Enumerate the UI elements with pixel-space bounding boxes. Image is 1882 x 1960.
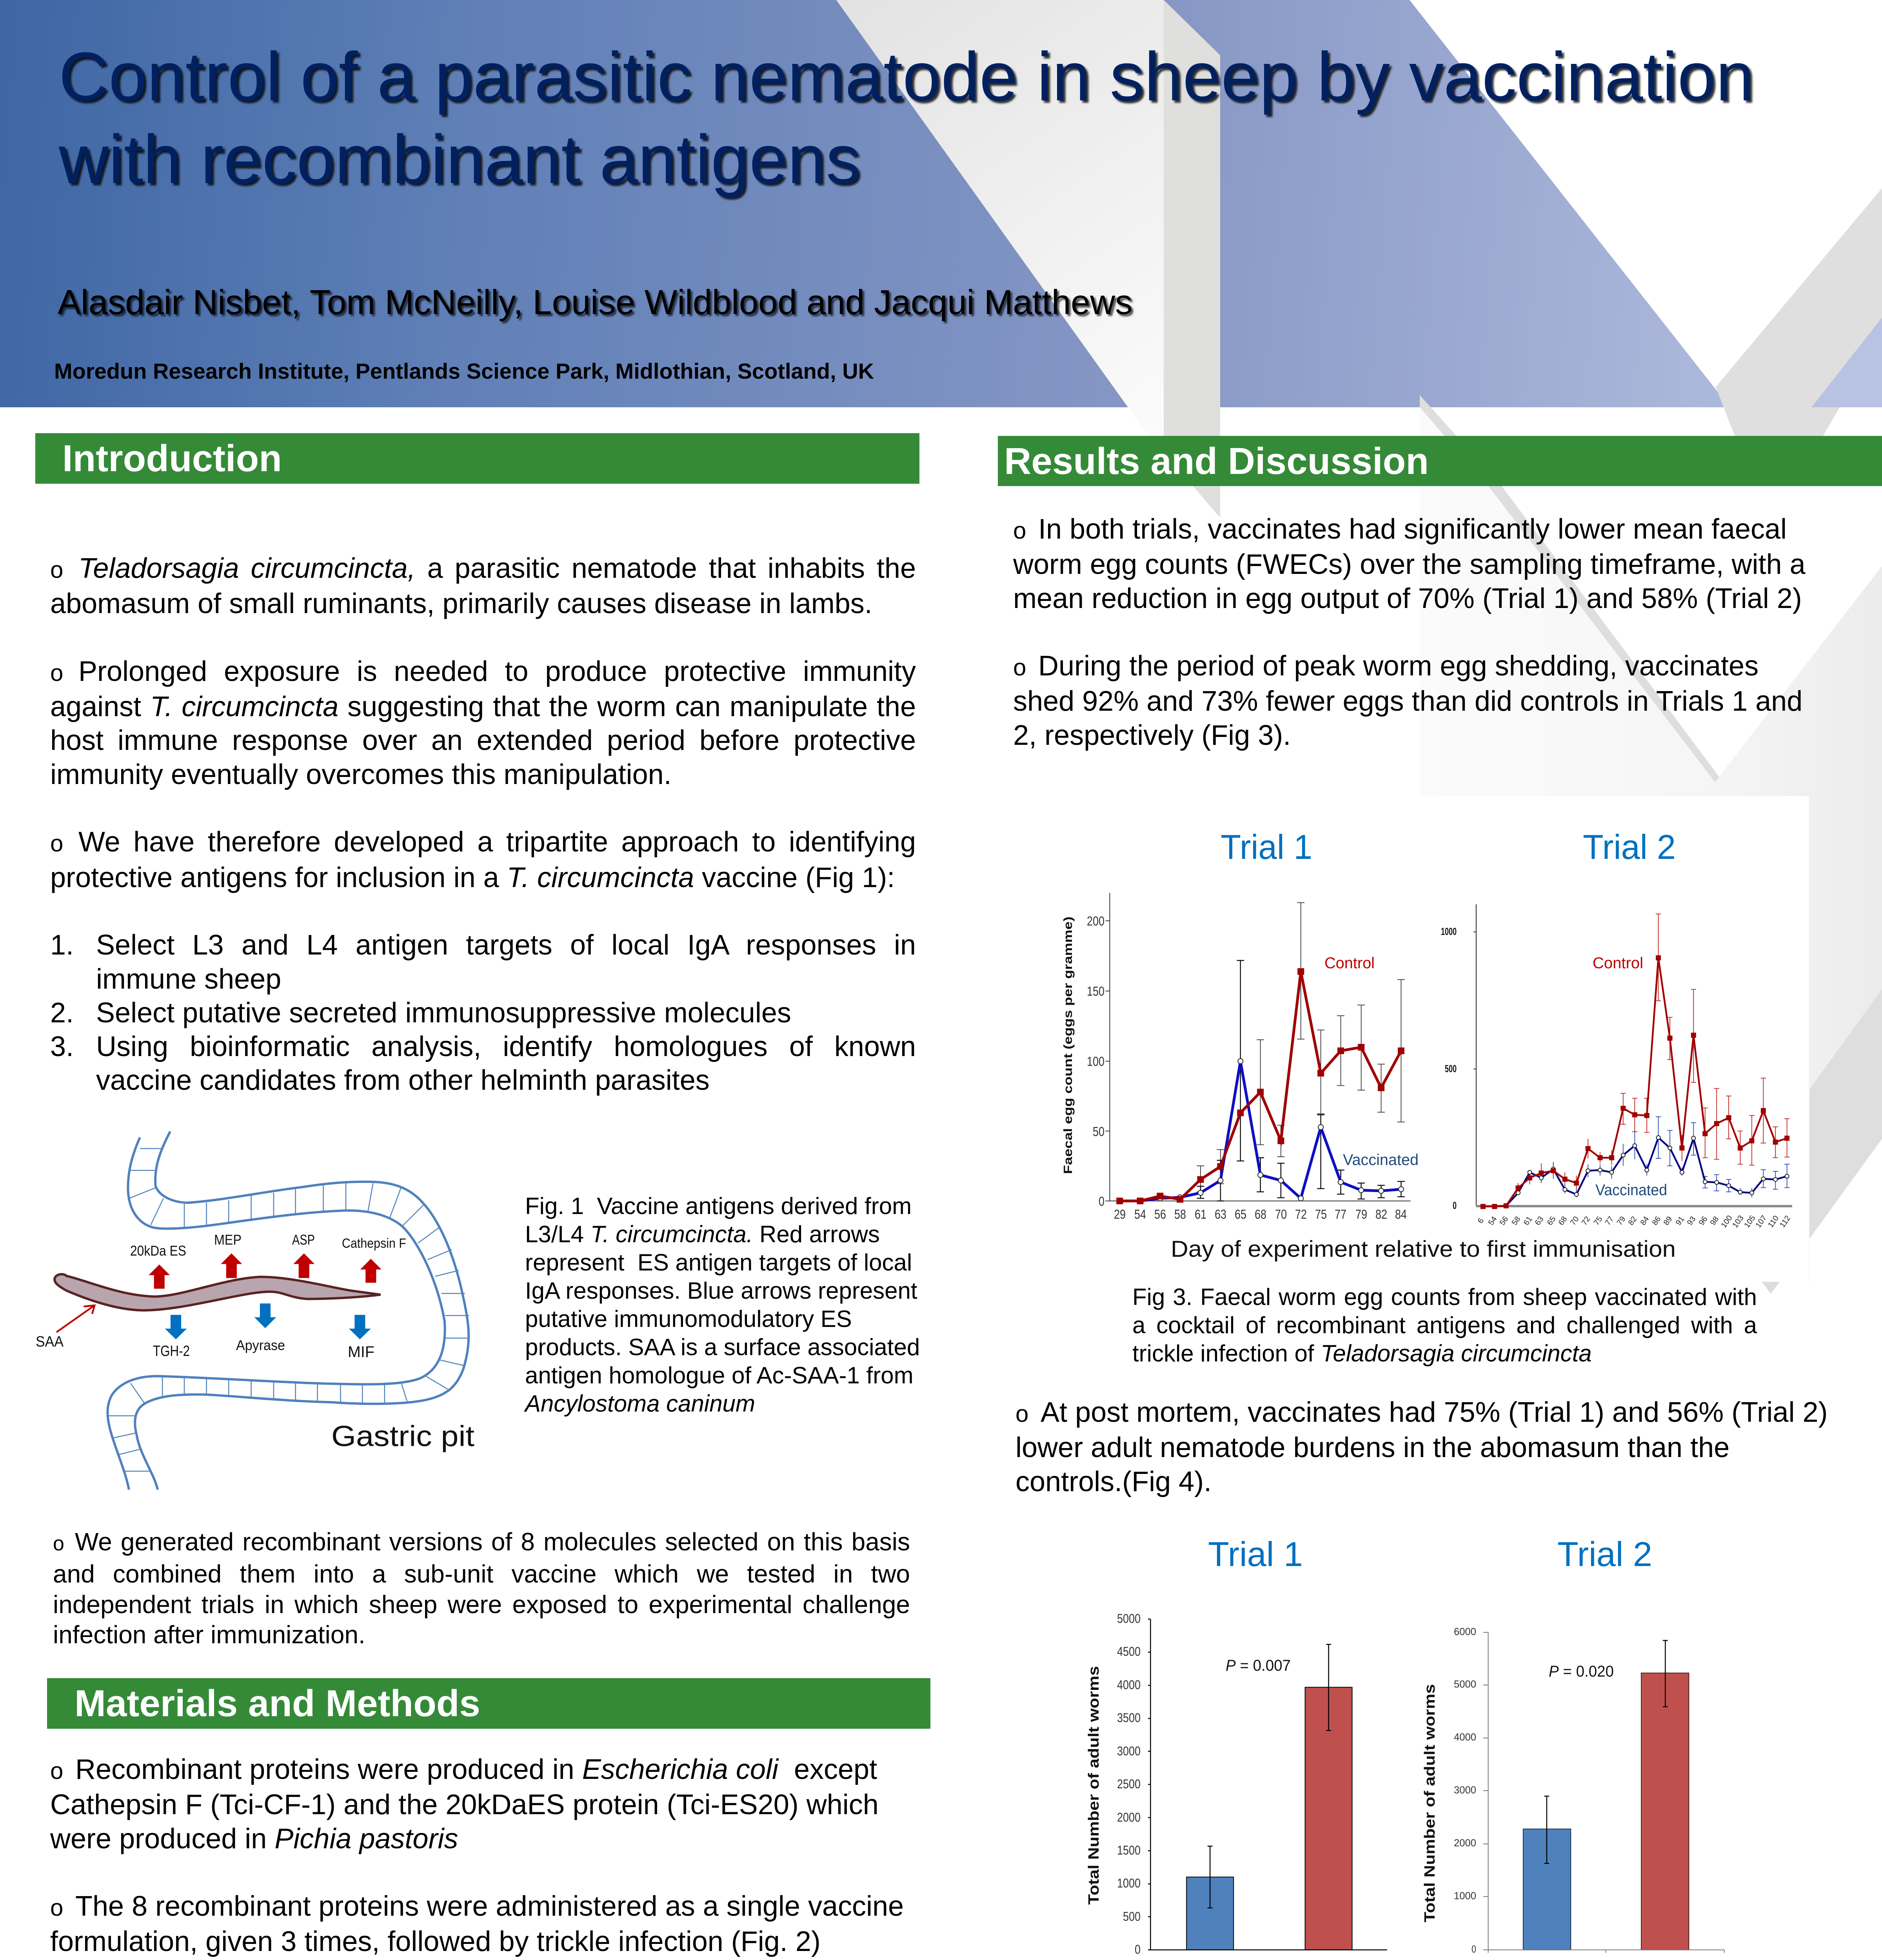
bar chart: trial 1: P = 0.007 <box>1226 1657 1291 1674</box>
line chart: trial 2: 112 <box>1778 1214 1792 1229</box>
text: recombinant vaccine: infection after immunization. <box>53 1621 365 1649</box>
text: introduction: abomasum of small ruminants, primarily causes disease in lambs. <box>50 588 872 619</box>
text: recombinant vaccine <box>53 1527 910 1650</box>
line chart: trial 1: 63 <box>1215 1207 1226 1221</box>
text: results: worm egg counts (FWECs) over the sampling timeframe, with a <box>1013 549 1806 580</box>
line chart: trial 2: 100 <box>1720 1214 1734 1230</box>
line chart: trial 1: 29 <box>1114 1207 1126 1221</box>
text: introduction <box>50 552 916 1098</box>
text: introduction: 2. <box>50 997 74 1029</box>
line chart: trial 2: 77 <box>1604 1215 1615 1227</box>
title: Control of a parasitic nematode in sheep by vaccination <box>59 38 1754 115</box>
figure 1 labels: Cathepsin F <box>342 1236 406 1251</box>
text: post mortem: lower adult nematode burdens in the abomasum than the <box>1015 1432 1729 1463</box>
caption: figure 1: products. SAA is a surface associated <box>525 1334 920 1360</box>
text: results: mean reduction in egg output of 70% (Trial 1) and 58% (Trial 2) <box>1013 583 1802 614</box>
chart title: trial 2: Trial 2 <box>1583 828 1676 866</box>
line chart: trial 2: 70 <box>1569 1215 1580 1227</box>
line chart: trial 2: 91 <box>1674 1215 1686 1227</box>
line chart: trial 2: 56 <box>1498 1215 1510 1227</box>
line chart: trial 1: 79 <box>1355 1207 1367 1221</box>
figure 3: faecal egg count charts <box>1061 828 1792 1262</box>
figure 1 labels <box>36 1232 474 1452</box>
text: introduction: Teladorsagia circumcincta, a parasitic nematode that inhabits the <box>78 553 916 584</box>
chart title: trial 2: Trial 2 <box>1557 1535 1652 1573</box>
text: materials and methods: formulation, given 3 times, followed by trickle infection (Fig. 2) <box>50 1926 821 1957</box>
line chart: trial 1: 68 <box>1255 1207 1266 1221</box>
text: introduction: Select putative secreted immunosuppressive molecules <box>96 997 791 1029</box>
blue immunomodulatory arrows <box>165 1303 371 1339</box>
caption: figure 3: Fig 3. Faecal worm egg counts from sheep vaccinated with <box>1132 1284 1757 1310</box>
line chart: trial 2: 98 <box>1709 1215 1720 1227</box>
text: introduction: Using bioinformatic analysis, identify homologues of known <box>96 1031 916 1062</box>
heading: materials and methods <box>47 1678 930 1729</box>
bar chart: trial 2: Total Number of adult worms <box>1422 1684 1438 1922</box>
line chart: trial 2: 63 <box>1533 1215 1545 1227</box>
caption: figure 1: antigen homologue of Ac-SAA-1 from <box>525 1362 914 1388</box>
line chart: trial 1: 100 <box>1087 1054 1104 1069</box>
line chart: trial 2: 75 <box>1592 1215 1604 1227</box>
title: with recombinant antigens <box>59 121 861 198</box>
text: introduction: Prolonged exposure is needed to produce protective immunity <box>78 656 916 687</box>
caption: figure 1: L3/L4 T. circumcincta. Red arrows <box>525 1221 880 1247</box>
figure 1: gastric pit diagram <box>36 1131 474 1490</box>
caption: figure 1: represent ES antigen targets of local <box>525 1249 912 1276</box>
figure 1 labels: Gastric pit <box>331 1420 474 1452</box>
text: introduction: 3. <box>50 1031 74 1062</box>
line chart: trial 1: 75 <box>1315 1207 1327 1221</box>
caption: figure 3 <box>1132 1283 1757 1368</box>
line chart: trial 1: 54 <box>1134 1207 1146 1221</box>
line chart: trial 2: 54 <box>1487 1215 1499 1227</box>
line chart: trial 2: 79 <box>1615 1215 1627 1227</box>
text: post mortem <box>1015 1396 1828 1499</box>
text: materials and methods: The 8 recombinant proteins were administered as a single vaccine <box>75 1891 904 1922</box>
chart title: trial 1: Trial 1 <box>1208 1535 1303 1573</box>
text: materials and methods: were produced in Pichia pastoris <box>50 1823 458 1855</box>
line chart: trial 2: Control <box>1593 955 1643 972</box>
line chart: trial 2: 96 <box>1697 1215 1709 1227</box>
bar chart: trial 2 <box>1422 1626 1724 1960</box>
bar chart: trial 1: 5000 <box>1117 1612 1141 1626</box>
line chart: trial 1: Vaccinated <box>1343 1151 1419 1169</box>
line chart: trial 1: 82 <box>1375 1207 1387 1221</box>
affiliation: Moredun Research Institute, Pentlands Science Park, Midlothian, Scotland, UK <box>54 359 874 383</box>
x axis label: Day of experiment relative to first immunisation <box>1171 1236 1676 1262</box>
red antigen arrows <box>149 1253 381 1289</box>
text: recombinant vaccine: We generated recombinant versions of 8 molecules selected on this basis <box>75 1528 910 1556</box>
text: materials and methods: Cathepsin F (Tci-CF-1) and the 20kDaES protein (Tci-ES20) which <box>50 1789 879 1820</box>
figure 1 labels: MIF <box>348 1343 374 1361</box>
line chart: trial 1: 61 <box>1195 1207 1206 1221</box>
line chart: trial 2: 58 <box>1510 1215 1522 1227</box>
text: recombinant vaccine: independent trials in which sheep were exposed to experimental challenge <box>53 1590 910 1619</box>
bar chart: trial 1: Total Number of adult worms <box>1086 1666 1102 1905</box>
line chart: trial 1: 72 <box>1295 1207 1307 1221</box>
figure 1 labels: ASP <box>292 1232 315 1248</box>
text: materials and methods: o <box>50 1895 63 1921</box>
bar chart: trial 1 <box>1086 1612 1387 1960</box>
text: results: o <box>1013 517 1026 544</box>
figure 1 labels: MEP <box>214 1232 242 1248</box>
bar chart: trial 2: 2000 <box>1454 1837 1476 1849</box>
bar chart: trial 1: 1500 <box>1117 1843 1141 1857</box>
heading: results and discussion: Results and Discussion <box>1004 440 1429 482</box>
bar chart: trial 1: 4500 <box>1117 1644 1141 1659</box>
bar chart: trial 2: 4000 <box>1454 1731 1476 1743</box>
line chart: trial 2: 103 <box>1731 1214 1746 1230</box>
figure 1 labels: 20kDa ES <box>130 1243 186 1259</box>
heading: introduction: Introduction <box>62 437 282 479</box>
chart title: trial 1: Trial 1 <box>1221 828 1312 866</box>
text: recombinant vaccine: and combined them into a sub-unit vaccine which we tested in two <box>53 1560 910 1588</box>
line chart: trial 1 <box>1087 893 1419 1221</box>
line chart: trial 2: 72 <box>1580 1215 1592 1227</box>
text: introduction: o <box>50 660 63 686</box>
bar chart: trial 1: 4000 <box>1117 1678 1141 1692</box>
line chart: trial 1: 56 <box>1154 1207 1166 1221</box>
authors: Alasdair Nisbet, Tom McNeilly, Louise Wildblood and Jacqui Matthews <box>58 283 1132 321</box>
line chart: trial 1: 200 <box>1087 914 1104 928</box>
bar chart: trial 1: 1000 <box>1117 1876 1141 1890</box>
line chart: trial 1: 70 <box>1275 1207 1287 1221</box>
bar chart: trial 2: P = 0.020 <box>1549 1663 1614 1680</box>
text: introduction: o <box>50 557 63 583</box>
bar chart: trial 2: 0 <box>1471 1943 1476 1955</box>
text: results: shed 92% and 73% fewer eggs than did controls in Trials 1 and <box>1013 686 1802 717</box>
line chart: trial 1: 0 <box>1099 1194 1104 1209</box>
SAA arrow <box>56 1305 94 1332</box>
text: introduction: immunity eventually overcomes this manipulation. <box>50 759 672 790</box>
bar chart: trial 1: 3500 <box>1117 1711 1141 1725</box>
bar chart: trial 1: 500 <box>1123 1909 1141 1924</box>
text: materials and methods: Recombinant proteins were produced in Escherichia coli except <box>75 1754 877 1785</box>
text: post mortem: o <box>1015 1401 1028 1427</box>
figure 1 labels: SAA <box>36 1334 64 1350</box>
line chart: trial 2: Vaccinated <box>1595 1181 1667 1199</box>
text: introduction: immune sheep <box>96 964 281 995</box>
line chart: trial 1: 77 <box>1335 1207 1346 1221</box>
bar chart: trial 1: 2000 <box>1117 1810 1141 1824</box>
header background <box>0 0 1882 1294</box>
line chart: trial 2 <box>1441 904 1792 1230</box>
line chart: trial 2: 89 <box>1662 1215 1674 1227</box>
text: results: o <box>1013 654 1026 681</box>
text: introduction: We have therefore developed a tripartite approach to identifying <box>78 826 916 858</box>
text: recombinant vaccine: o <box>53 1532 64 1555</box>
figure 1 labels: TGH-2 <box>153 1343 190 1359</box>
line chart: trial 1: 50 <box>1093 1124 1104 1139</box>
line chart: trial 2: 1000 <box>1441 926 1457 937</box>
line chart: trial 2: 84 <box>1639 1215 1651 1227</box>
line chart: trial 2: 61 <box>1522 1215 1534 1227</box>
caption: figure 1 <box>525 1192 920 1418</box>
text: results: In both trials, vaccinates had significantly lower mean faecal <box>1038 514 1787 545</box>
text: materials and methods <box>50 1753 912 1960</box>
line chart: trial 1: 65 <box>1235 1207 1246 1221</box>
bar chart: trial 2: 6000 <box>1454 1626 1476 1637</box>
bar chart: trial 2: 1000 <box>1454 1890 1476 1902</box>
heading: materials and methods: Materials and Methods <box>74 1682 480 1724</box>
line chart: trial 1: Control <box>1324 955 1375 972</box>
line chart: trial 2: 82 <box>1627 1215 1639 1227</box>
line chart: trial 2: 0 <box>1453 1200 1457 1211</box>
gastric pit wall <box>107 1131 469 1490</box>
worm <box>54 1274 381 1310</box>
bar chart: trial 1: 0 <box>1135 1942 1141 1956</box>
text: post mortem: At post mortem, vaccinates had 75% (Trial 1) and 56% (Trial 2) <box>1041 1397 1828 1428</box>
text: introduction: Select L3 and L4 antigen targets of local IgA responses in <box>96 929 916 961</box>
caption: figure 1: putative immunomodulatory ES <box>525 1306 852 1332</box>
text: introduction: host immune response over an extended period before protective <box>50 725 916 756</box>
y axis label: Faecal egg count (eggs per gramme) <box>1061 916 1075 1174</box>
heading: results and discussion <box>998 436 1882 486</box>
text: results: 2, respectively (Fig 3). <box>1013 720 1291 751</box>
line chart: trial 1: 84 <box>1395 1207 1407 1221</box>
line chart: trial 2: 93 <box>1686 1215 1697 1227</box>
text: introduction: against T. circumcincta suggesting that the worm can manipulate the <box>50 691 916 722</box>
bar chart: trial 2: 5000 <box>1454 1678 1476 1690</box>
line chart: trial 2: 107 <box>1754 1214 1769 1230</box>
bar chart: trial 1: 2500 <box>1117 1777 1141 1791</box>
caption: figure 3: trickle infection of Teladorsagia circumcincta <box>1132 1340 1592 1367</box>
text: results: During the period of peak worm egg shedding, vaccinates <box>1038 650 1758 682</box>
bar chart: trial 2: 3000 <box>1454 1784 1476 1796</box>
bar chart: trial 1: 3000 <box>1117 1744 1141 1758</box>
line chart: trial 2: 65 <box>1546 1215 1557 1227</box>
title <box>59 36 1754 201</box>
caption: figure 3: a cocktail of recombinant antigens and challenged with a <box>1132 1312 1757 1338</box>
figure 1 labels: Apyrase <box>236 1337 285 1353</box>
caption: figure 1: Ancylostoma caninum <box>525 1390 755 1417</box>
line chart: trial 2: 6 <box>1476 1217 1486 1225</box>
line chart: trial 1: 58 <box>1174 1207 1186 1221</box>
text: introduction: protective antigens for inclusion in a T. circumcincta vaccine (Fig 1): <box>50 862 895 893</box>
text: results <box>1013 512 1806 752</box>
heading: introduction <box>35 433 919 484</box>
line chart: trial 2: 105 <box>1743 1214 1757 1230</box>
text: materials and methods: o <box>50 1758 63 1784</box>
figure 4: adult worm count charts <box>1086 1535 1724 1960</box>
text: introduction: vaccine candidates from other helminth parasites <box>96 1065 710 1096</box>
text: introduction: 1. <box>50 929 74 961</box>
caption: figure 1: Fig. 1 Vaccine antigens derived from <box>525 1193 912 1219</box>
line chart: trial 2: 110 <box>1766 1214 1780 1229</box>
line chart: trial 2: 68 <box>1557 1215 1569 1227</box>
line chart: trial 1: 150 <box>1087 984 1104 998</box>
text: post mortem: controls.(Fig 4). <box>1015 1466 1212 1497</box>
text: introduction: o <box>50 830 63 857</box>
caption: figure 1: IgA responses. Blue arrows represent <box>525 1278 917 1304</box>
line chart: trial 2: 500 <box>1445 1063 1457 1074</box>
panel: figure 3 white backing <box>1019 796 1809 1282</box>
line chart: trial 2: 86 <box>1651 1215 1662 1227</box>
